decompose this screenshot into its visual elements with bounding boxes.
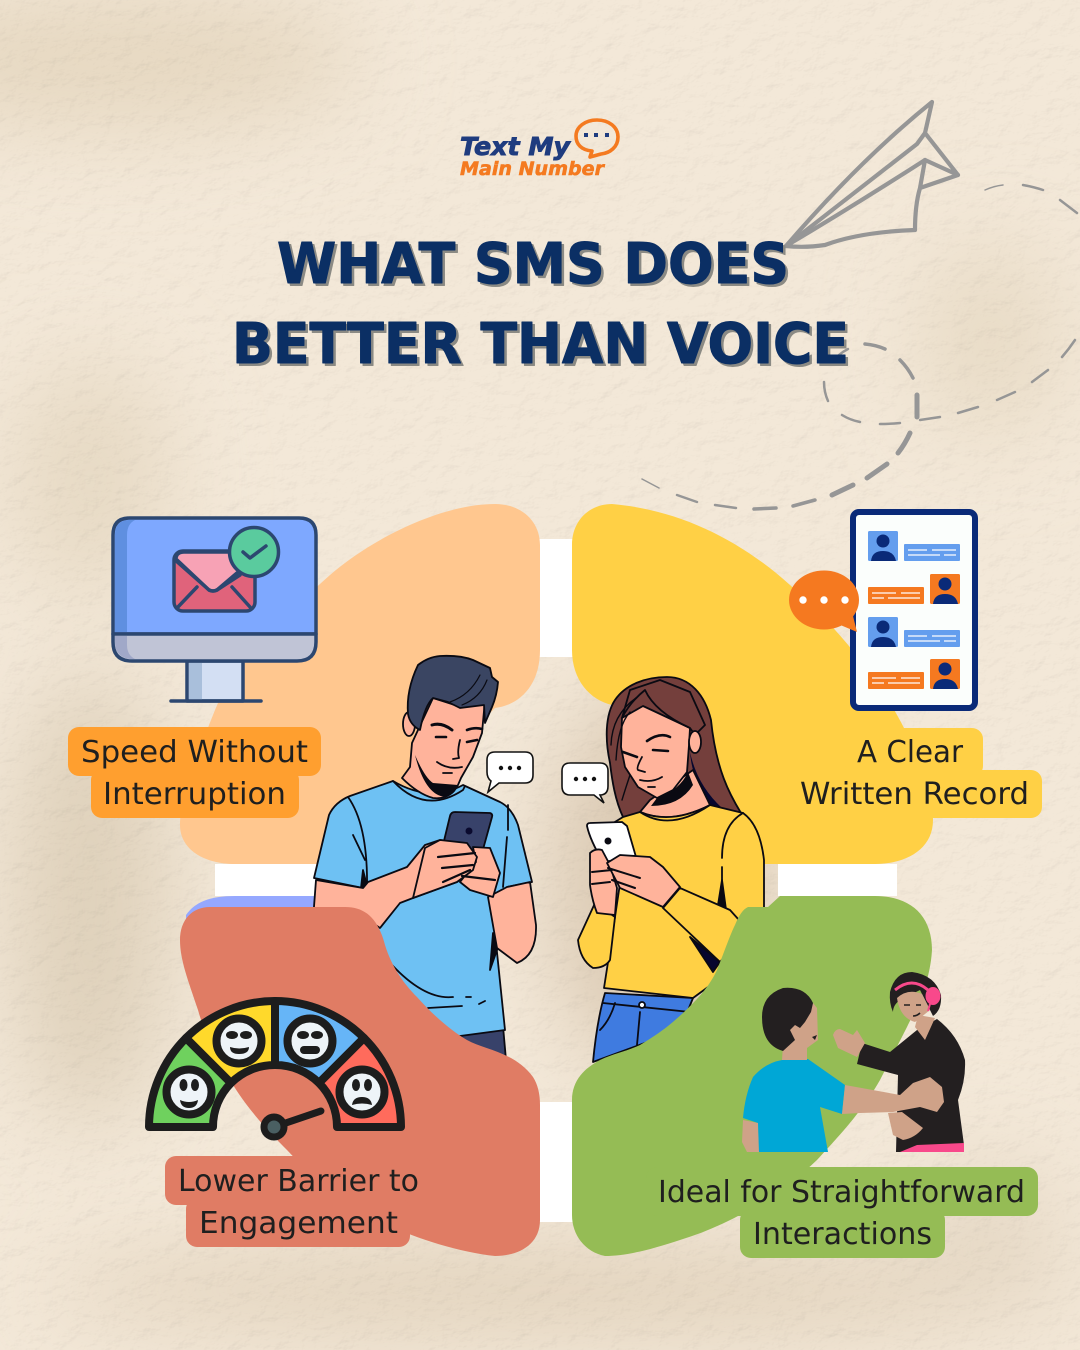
monitor stand [171,661,261,701]
woman with headset [833,972,965,1152]
logo [460,120,618,180]
man hair [408,656,498,730]
label: lower barrier to engagement: Lower Barrier to [178,1164,419,1199]
label: ideal for straightforward interactions: Ideal for Straightforward [658,1175,1025,1210]
woman front hair [622,680,705,735]
icon: sentiment gauge [149,1001,401,1137]
label: speed without interruption: Interruption [103,777,286,812]
woman right sleeve [663,888,748,962]
gauge sector yellow [186,1001,275,1083]
dashed flight path [642,185,1077,509]
icon: monitor with email [113,518,316,701]
woman neck shadow [651,772,693,806]
gauge sector blue [275,1001,364,1083]
gauge needle [264,1111,321,1137]
chat row 2 [868,574,960,604]
label: ideal for straightforward interactions [646,1167,1038,1258]
man neck shadow [415,755,458,797]
man trousers [455,1026,506,1060]
panel: salmon petal [180,907,540,1256]
face happy [166,1070,212,1114]
woman sleeve shadow [690,937,720,972]
man neck and face [402,698,485,798]
woman phone [587,822,636,862]
label: speed without interruption [68,727,321,818]
label: a clear written record: Written Record [800,777,1029,812]
title: WHAT SMS DOES [280,234,792,300]
man hands [460,847,500,897]
man shirt shadows [360,870,498,970]
label: ideal for straightforward interactions: Interactions [753,1217,932,1252]
face slight smile [216,1018,262,1064]
illustration: two people talking [742,972,965,1152]
icon: tablet chat record [789,512,975,708]
man right arm [488,882,536,963]
panel: periwinkle backing [186,896,330,930]
woman hands [590,849,617,915]
title: WHAT SMS DOES [277,232,789,297]
orange chat bubble [789,570,859,632]
label: lower barrier to engagement: Engagement [199,1206,398,1241]
check badge [230,528,278,576]
title [232,232,852,380]
woman face [621,706,690,798]
logo text: Main Number [460,158,606,180]
monitor screen [113,518,316,661]
label: speed without interruption: Speed Without [81,735,308,770]
chat row 4 [868,659,960,689]
woman face details [623,735,670,757]
man ear [403,712,415,736]
face neutral [288,1018,332,1064]
icon: paper plane [786,102,958,247]
man collar and shirt seams [348,781,508,1008]
logo chat bubble [576,120,618,157]
man left arm [313,840,477,928]
woman hair [607,677,741,817]
panel: yellow petal [572,504,933,864]
logo text: Text My [460,132,572,161]
title: BETTER THAN VOICE [232,312,849,377]
tablet body [853,512,975,708]
envelope [174,551,255,611]
label: a clear written record [787,728,1042,818]
illustration: man texting [313,656,536,1060]
panel: orange petal [180,504,540,864]
woman ear [689,731,701,753]
gauge sector green [149,1038,231,1127]
woman left sleeve [578,903,615,968]
man face details [432,724,452,730]
white cross connectors [215,539,897,1222]
woman neck [640,770,710,817]
speech bubble: man [487,752,533,792]
woman hair shadow [690,752,722,808]
gauge sector red [319,1038,401,1127]
illustration: woman texting [578,677,764,1062]
face sad [340,1070,384,1114]
man shirt [314,781,532,1040]
title: BETTER THAN VOICE [234,314,852,380]
label: lower barrier to engagement [165,1156,432,1247]
label: a clear written record: A Clear [857,735,964,770]
chat row 1 [868,531,960,561]
speech bubble: woman [562,763,608,803]
woman jeans [593,993,693,1062]
woman sweater [604,805,764,998]
man phone [443,812,492,853]
chat row 3 [868,617,960,647]
logo text [460,132,606,180]
boy in blue shirt [742,988,944,1152]
panel: green petal [572,896,932,1256]
